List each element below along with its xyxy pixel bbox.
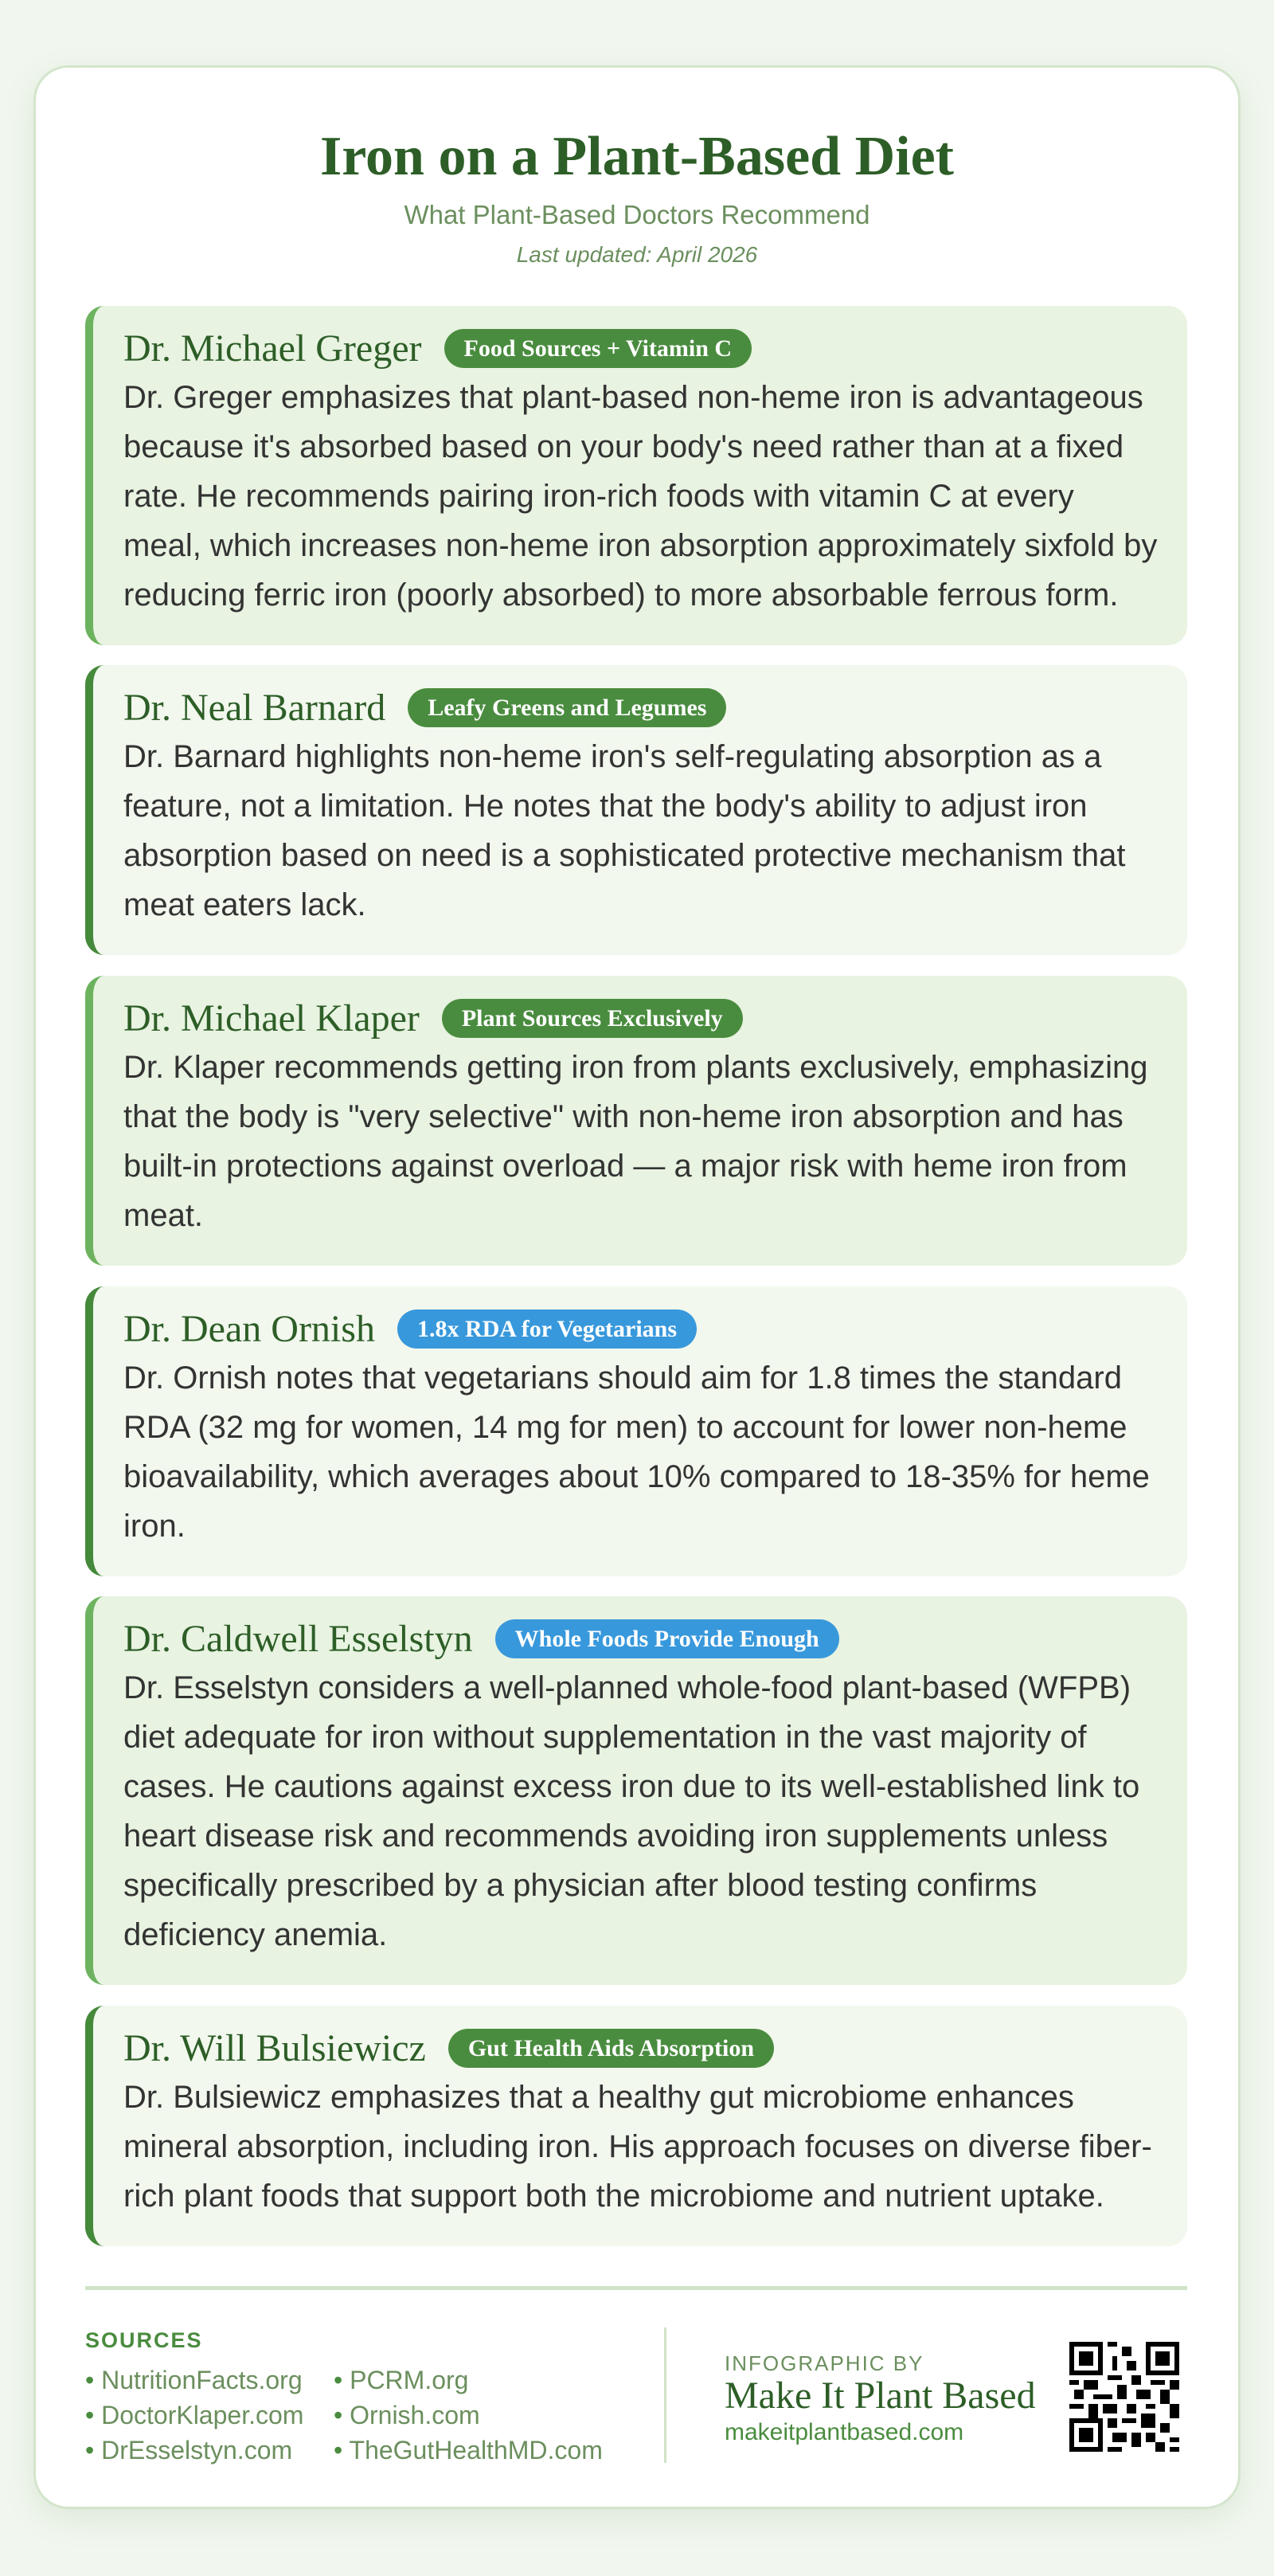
title: Iron on a Plant-Based Diet	[320, 126, 954, 187]
header: Esselstyn	[123, 1617, 839, 1660]
panel: Greger	[85, 306, 1187, 645]
panel: Klaper	[85, 976, 1187, 1266]
sources: • DoctorKlaper.com	[85, 2401, 303, 2429]
infographic by: Make It Plant Based	[725, 2374, 1036, 2417]
header: Klaper: Plant Sources Exclusively	[462, 1005, 723, 1031]
infographic by: makeitplantbased.com	[725, 2419, 963, 2445]
header: Barnard	[123, 687, 726, 728]
text: Klaper: Dr. Klaper recommends getting iron from plants exclusively, emphasizing that the body is "very selective" with non-heme iron absorption and has built-in protections against overload — a major risk with heme iron from meat.	[123, 1050, 1147, 1233]
header: Ornish: 1.8x RDA for Vegetarians	[417, 1316, 677, 1341]
panel: Bulsiewicz	[85, 2006, 1187, 2246]
header: Klaper	[123, 997, 743, 1039]
icon: QR code	[1069, 2342, 1179, 2452]
infographic by	[725, 2351, 1036, 2445]
text: Bulsiewicz: Dr. Bulsiewicz emphasizes that a healthy gut microbiome enhances mineral absorption, including iron. His approach focuses on diverse fiber-rich plant foods that support both the microbiome and nutrient uptake.	[123, 2080, 1152, 2214]
sources: • PCRM.org	[334, 2366, 468, 2394]
panel: Ornish	[85, 1286, 1187, 1576]
infographic by: INFOGRAPHIC BY	[725, 2351, 924, 2375]
header: Greger: Dr. Michael Greger	[123, 327, 422, 370]
header: Ornish	[123, 1308, 697, 1349]
header: Klaper: Dr. Michael Klaper	[123, 997, 420, 1039]
header: Ornish: Dr. Dean Ornish	[123, 1308, 375, 1349]
sources	[85, 2328, 603, 2464]
header: Esselstyn: Whole Foods Provide Enough	[515, 1625, 819, 1652]
sources: • DrEsselstyn.com	[85, 2436, 292, 2464]
sources: SOURCES	[85, 2328, 203, 2352]
last updated: Last updated: April 2026	[517, 242, 757, 267]
panel: Esselstyn	[85, 1596, 1187, 1985]
header: Greger: Food Sources + Vitamin C	[464, 335, 732, 362]
header: Esselstyn: Dr. Caldwell Esselstyn	[123, 1617, 473, 1660]
sources: • Ornish.com	[334, 2401, 480, 2429]
header: Bulsiewicz: Gut Health Aids Absorption	[468, 2034, 754, 2061]
panel: Barnard	[85, 665, 1187, 955]
header: Bulsiewicz	[123, 2026, 774, 2069]
header: Barnard: Dr. Neal Barnard	[123, 687, 385, 728]
header: Barnard: Leafy Greens and Legumes	[428, 695, 706, 720]
header: Greger	[123, 327, 752, 370]
text: Barnard: Dr. Barnard highlights non-heme iron's self-regulating absorption as a feature, not a limitation. He notes that the body's ability to adjust iron absorption based on need is a sophisticated protective mechanism that meat eaters lack.	[123, 739, 1126, 922]
text: Greger: Dr. Greger emphasizes that plant-based non-heme iron is advantageous because it's absorbed based on your body's need rather than at a fixed rate. He recommends pairing iron-rich foods with vitamin C at every meal, which increases non-heme iron absorption approximately sixfold by reducing ferric iron (poorly absorbed) to more absorbable ferrous form.	[123, 380, 1157, 613]
sources: • TheGutHealthMD.com	[334, 2436, 603, 2464]
header: Bulsiewicz: Dr. Will Bulsiewicz	[123, 2026, 426, 2069]
sources: • NutritionFacts.org	[85, 2366, 303, 2394]
text: Esselstyn: Dr. Esselstyn considers a well-planned whole-food plant-based (WFPB) diet adequate for iron without supplementation in the vast majority of cases. He cautions against excess iron due to its well-established link to heart disease risk and recommends avoiding iron supplements unless specifically prescribed by a physician after blood testing confirms deficiency anemia.	[123, 1670, 1139, 1952]
text: Ornish: Dr. Ornish notes that vegetarians should aim for 1.8 times the standard RDA (32 mg for women, 14 mg for men) to account for lower non-heme bioavailability, which averages about 10% compared to 18-35% for heme iron.	[123, 1360, 1150, 1544]
subtitle: What Plant-Based Doctors Recommend	[404, 200, 870, 229]
